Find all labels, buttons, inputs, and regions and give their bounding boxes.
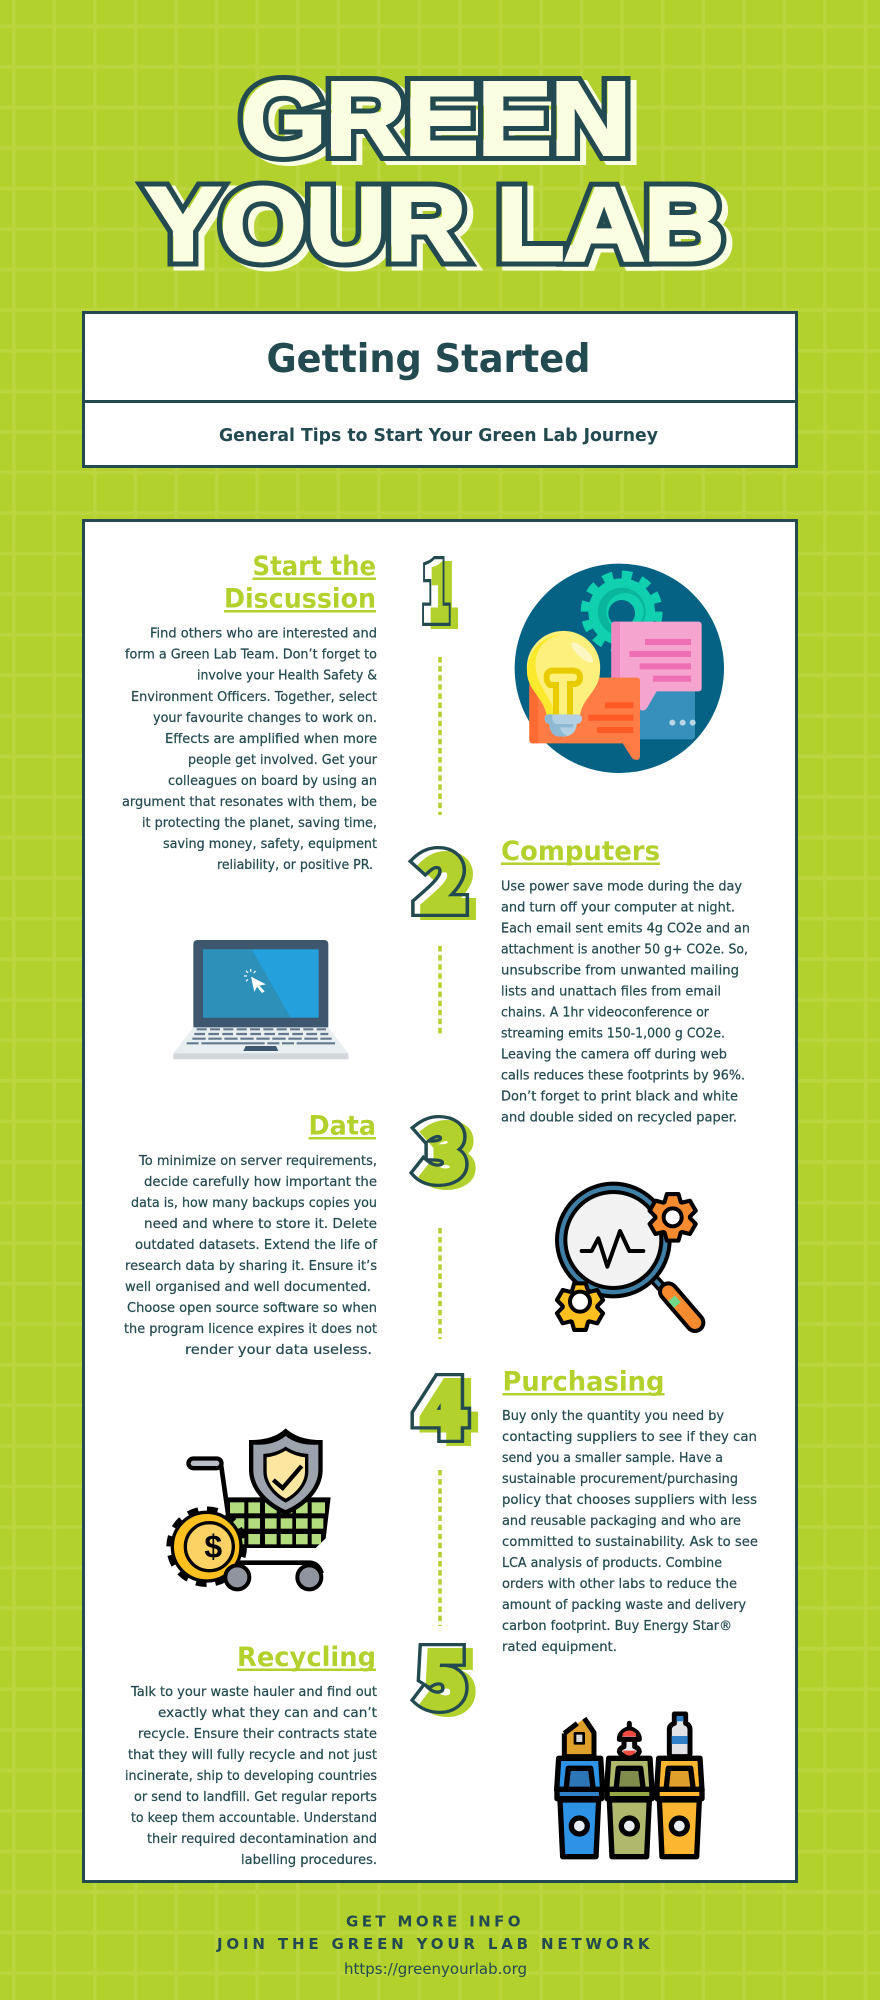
text block: computers: streaming emits 150-1,000 g CO2e. (501, 1027, 725, 1042)
step numbers 1 to 5: 2 (422, 823, 475, 939)
text block: data: well organised and well documented. (125, 1280, 371, 1295)
step numbers 1 to 5: 1 (430, 532, 458, 648)
panel: steps (84, 520, 796, 1882)
icon: shopping cart with shield: $ (204, 1528, 222, 1564)
footer call to action: GET MORE INFO (346, 1913, 524, 1931)
text block: data (124, 1154, 377, 1358)
text block: purchasing: rated equipment. (502, 1640, 617, 1655)
text block: start the discussion: Find others who are interested and (150, 627, 377, 642)
section 5: recycling (125, 1642, 377, 1868)
text block: recycling: their required decontamination and (147, 1832, 377, 1847)
step numbers 1 to 5 (408, 556, 478, 1717)
title (134, 75, 732, 272)
text block: start the discussion: Environment Officers. Together, select (131, 690, 377, 705)
text block: data: decide carefully how important the (144, 1175, 377, 1190)
footer call to action (216, 1913, 653, 1978)
icon: ideas and speech bubbles (515, 564, 724, 773)
text block: computers: Leaving the camera off during web (501, 1048, 727, 1063)
text block: computers: Each email sent emits 4g CO2e and an (501, 922, 750, 937)
icon: shopping cart with shield (172, 1428, 331, 1589)
text block: computers: chains. A 1hr videoconference or (501, 1006, 710, 1021)
text block: purchasing: policy that chooses suppliers with less (502, 1493, 757, 1508)
heading: data: Data (308, 1110, 376, 1142)
text block: recycling: that they will fully recycle and not just (128, 1748, 377, 1763)
text block: recycling: or send to landfill. Get regular reports (134, 1790, 377, 1805)
title: GREEN (246, 65, 636, 180)
step numbers 1 to 5: 4 (423, 1349, 475, 1465)
heading: start the discussion: Discussion (224, 584, 376, 615)
text block: start the discussion: Effects are amplified when more (165, 732, 377, 747)
footer call to action: https://greenyourlab.org (344, 1960, 527, 1978)
text block: start the discussion: it protecting the planet, saving time, (142, 816, 377, 831)
title: YOUR LAB (152, 170, 730, 286)
text block: recycling (125, 1685, 377, 1868)
text block: computers: Use power save mode during the day (501, 880, 742, 895)
text block: purchasing: orders with other labs to reduce the (502, 1577, 737, 1592)
icon: magnifying glass with gears (548, 1182, 704, 1338)
heading: start the discussion: Start the (252, 551, 376, 582)
text block: purchasing: sustainable procurement/purchasing (502, 1472, 738, 1487)
text block: start the discussion: involve your Health Safety & (197, 669, 377, 684)
panel: getting started header (83, 312, 797, 466)
text block: purchasing: amount of packing waste and delivery (502, 1598, 746, 1613)
subtitle: General Tips to Start Your Green Lab Journey (219, 425, 658, 446)
text block: recycling: Talk to your waste hauler and find out (130, 1685, 377, 1700)
text block: purchasing: carbon footprint. Buy Energy Star® (502, 1619, 732, 1634)
text block: computers: Don’t forget to print black and white (501, 1090, 738, 1105)
text block: recycling: exactly what they can and can’t (158, 1706, 377, 1721)
text block: start the discussion: argument that resonates with them, be (122, 795, 377, 810)
text block: recycling: to keep them accountable. Understand (131, 1811, 377, 1826)
step numbers 1 to 5: 5 (424, 1619, 475, 1735)
section 2: computers (501, 836, 750, 1126)
heading: computers: Computers (501, 836, 660, 867)
text block: computers: and turn off your computer at night. (501, 901, 735, 916)
step numbers 1 to 5: 3 (423, 1092, 475, 1208)
section 4: purchasing (502, 1367, 758, 1655)
text block: start the discussion: form a Green Lab Team. Don’t forget to (125, 648, 377, 663)
text block: computers: attachment is another 50 g+ CO2e. So, (501, 943, 748, 958)
text block: purchasing (502, 1409, 758, 1655)
text block: recycling: incinerate, ship to developing countries (125, 1769, 377, 1784)
text block: purchasing: contacting suppliers to see if they can (502, 1430, 757, 1445)
text block: computers: lists and unattach files from email (501, 985, 721, 1000)
text block: start the discussion (122, 627, 378, 873)
section 1: start the discussion (122, 551, 378, 873)
text block: data: outdated datasets. Extend the life of (135, 1238, 377, 1253)
text block: purchasing: send you a smaller sample. Have a (502, 1451, 723, 1466)
text block: computers: unsubscribe from unwanted mailing (501, 964, 739, 979)
text block: data: render your data useless. (185, 1343, 372, 1358)
heading: getting started: Getting Started (266, 337, 590, 382)
text block: purchasing: committed to sustainability. Ask to see (502, 1535, 758, 1550)
icon: recycling bins (557, 1714, 702, 1857)
text block: computers: and double sided on recycled paper. (501, 1111, 737, 1126)
text block: purchasing: LCA analysis of products. Combine (502, 1556, 722, 1571)
text block: computers: calls reduces these footprints by 96%. (501, 1069, 745, 1084)
heading: recycling: Recycling (237, 1642, 376, 1673)
icon: laptop (173, 940, 348, 1059)
text block: start the discussion: people get involved. Get your (188, 753, 378, 768)
text block: start the discussion: reliability, or positive PR. (217, 858, 373, 873)
text block: data: research data by sharing it. Ensure it’s (125, 1259, 377, 1274)
text block: data: need and where to store it. Delete (144, 1217, 377, 1232)
footer call to action: JOIN THE GREEN YOUR LAB NETWORK (216, 1935, 653, 1953)
text block: start the discussion: your favourite changes to work on. (153, 711, 377, 726)
text block: recycling: labelling procedures. (241, 1853, 377, 1868)
text block: purchasing: Buy only the quantity you need by (502, 1409, 724, 1424)
text block: data: the program licence expires it does not (124, 1322, 377, 1337)
heading: purchasing: Purchasing (502, 1367, 664, 1398)
text block: recycling: recycle. Ensure their contracts state (138, 1727, 377, 1742)
text block: computers (501, 880, 750, 1126)
dotted connector lines (438, 657, 442, 1626)
text block: start the discussion: colleagues on board by using an (168, 774, 377, 789)
text block: purchasing: and reusable packaging and who are (502, 1514, 741, 1529)
text block: data: data is, how many backups copies you (131, 1196, 377, 1211)
text block: data: To minimize on server requirements, (138, 1154, 377, 1169)
section 3: data (124, 1110, 377, 1358)
text block: start the discussion: saving money, safety, equipment (163, 837, 377, 852)
text block: data: Choose open source software so when (127, 1301, 377, 1316)
heading: start the discussion (224, 551, 376, 615)
